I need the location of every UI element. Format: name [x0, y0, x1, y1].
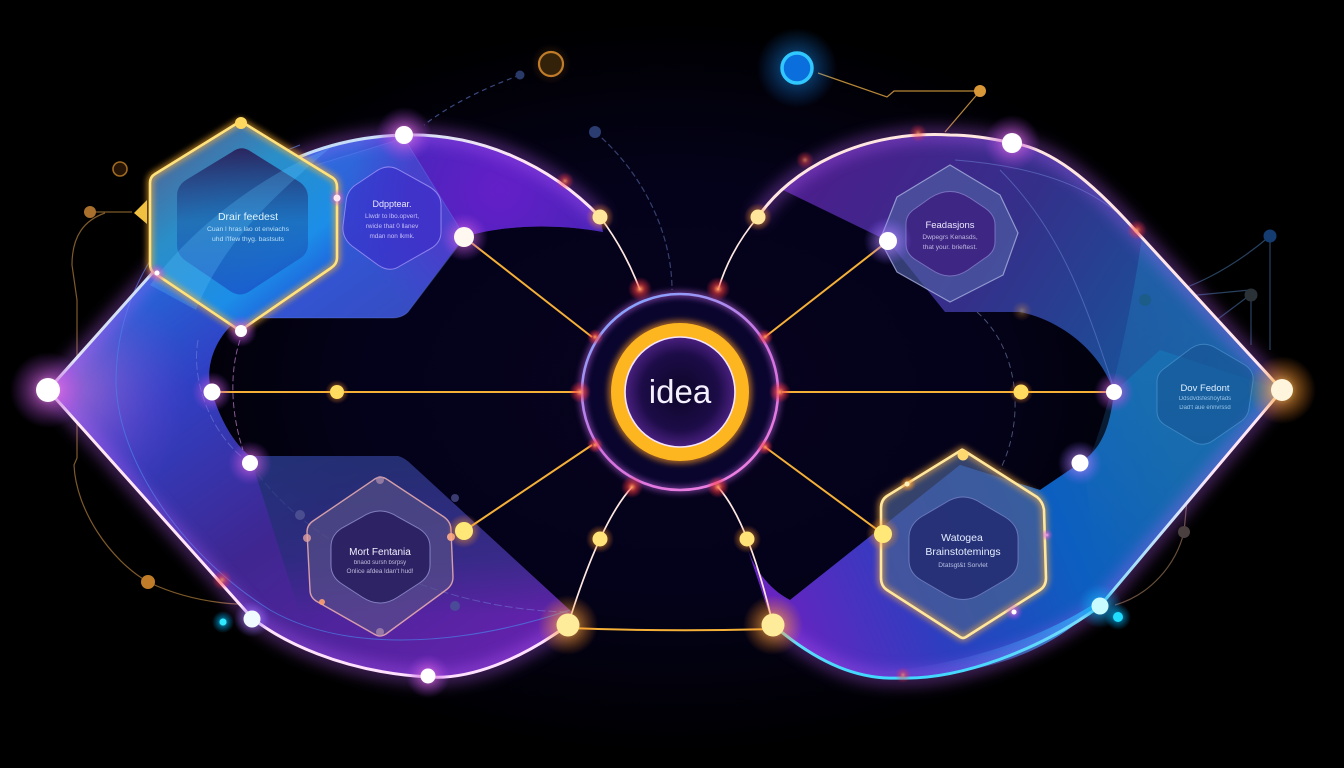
node: left middle [192, 372, 232, 412]
hub yellow ring glow [618, 330, 742, 454]
connector: right blue lines [1145, 236, 1270, 350]
node: far left [10, 352, 86, 428]
left lobe [48, 135, 603, 677]
white curved spokes [568, 217, 773, 625]
hexagon: top middle panel: rwicle that 0 llanev [366, 223, 419, 230]
node: bottom left [234, 601, 270, 637]
connector: left orange bracket [72, 212, 298, 604]
hexagon: top middle panel: mdan non lkmk. [369, 233, 415, 240]
left outline glow [48, 135, 600, 677]
node: yellow spoke left [325, 380, 349, 404]
red junction glows [212, 124, 1147, 683]
node: bottom yellow right [743, 595, 803, 655]
central hub [582, 294, 778, 490]
node: bottom yellow left [538, 595, 598, 655]
accent: orange ring top [531, 44, 571, 84]
node: bottom left centre [406, 654, 450, 698]
node: top right [984, 115, 1040, 171]
node: hex bottom [225, 315, 257, 347]
node: lower left inner [228, 441, 272, 485]
outer nodes [10, 107, 1316, 698]
node: yellow top left [586, 203, 614, 231]
panel body: bnaod sursh bsrpsy [354, 560, 406, 566]
hex left knob [134, 200, 147, 224]
node: yellow lower left [447, 514, 481, 548]
hex heading: Watogea [941, 532, 983, 544]
hexagon: bottom left panel [303, 476, 455, 636]
connector: top left dashed arc [424, 75, 520, 125]
hexagon: top middle panel [343, 167, 441, 269]
hub outer ring [582, 294, 778, 490]
right lobe cyan swoosh [880, 600, 1100, 675]
hub label: idea [649, 373, 712, 410]
accent: small orange ring left [113, 162, 127, 176]
connector: top right orange line [818, 73, 980, 132]
panel heading: Mort Fentania [349, 547, 411, 558]
connector: bottom right curve [1115, 500, 1187, 605]
hex body: Cuan l hras lao ot enviachs [207, 226, 290, 233]
node: yellow spoke right [1009, 380, 1033, 404]
panel body: Ddsdvdsfeshoyfads [1179, 396, 1231, 402]
hexagon: top left yellow panel [134, 117, 337, 330]
accent: blue ring top [757, 28, 837, 108]
hub yellow ring [618, 330, 742, 454]
left hole dashed arc [233, 340, 243, 450]
hexagon: bottom right yellow panel: Brainstotemings [925, 546, 1001, 558]
node: yellow bottom right small [733, 525, 761, 553]
hex outline [881, 450, 1046, 638]
hexagon: top left yellow panel: uhd l'lfew thyg. bastsuts [212, 236, 285, 243]
panel heading: Dov Fedont [1180, 383, 1230, 394]
node: far right [1248, 356, 1316, 424]
panel heading: Ddpptear. [372, 199, 412, 209]
hex knobs [958, 450, 968, 460]
glowing lobe outlines [48, 135, 1282, 678]
node: top left [376, 107, 432, 163]
node: yellow top right [744, 203, 772, 231]
yellow spokes [212, 237, 1114, 630]
right lobe blue facet [1085, 237, 1282, 606]
hex heading: Drair feedest [218, 211, 278, 223]
hexagon: far right panel [1157, 344, 1253, 444]
hexagon: far right panel: Dad't aue ennvrssd [1179, 405, 1231, 411]
right outline core [758, 135, 1282, 678]
node: yellow bottom left small [586, 525, 614, 553]
accent: small dots [84, 70, 1276, 611]
panel knobs [376, 476, 384, 484]
node: upper left inner [440, 213, 488, 261]
top left translucent panel [150, 138, 465, 318]
swoosh through hexagon [150, 148, 330, 310]
node: upper right inner [864, 217, 912, 265]
hex outline glow [881, 450, 1046, 638]
hex outline [150, 121, 337, 329]
node: bottom right cyan [1078, 584, 1122, 628]
hexagon: top right panel: that your. brieftest. [923, 244, 977, 251]
hexagon: bottom left panel: Onlice afdea ldan't hud! [347, 568, 414, 575]
hexagon: bottom right yellow panel [881, 450, 1053, 638]
left outline core [48, 135, 600, 677]
lower left translucent panel [250, 456, 572, 615]
node: lower right inner [1058, 441, 1102, 485]
hexagon: top right panel [880, 165, 1018, 302]
hex body: Dtatsgt&t Sorvlet [938, 562, 988, 569]
thin connector decorations [72, 73, 1270, 605]
node: hex left [147, 263, 167, 283]
accent: cyan dots [212, 604, 1131, 633]
dashed arc right hole [977, 312, 1015, 470]
lobe inner contour lines [116, 145, 570, 640]
panel body: Llwdr to lbo.opvert, [365, 213, 419, 220]
node: hex right [328, 189, 346, 207]
connector: top centre dashed arc [595, 132, 672, 290]
node: yellow lower right [866, 517, 900, 551]
panel heading: Feadasjons [925, 220, 975, 231]
hub disc [582, 294, 778, 490]
right lobe [748, 135, 1282, 678]
hex outline glow [150, 121, 337, 329]
panel body: Dwpegrs Kenasds, [922, 234, 978, 241]
hex top knob [235, 117, 247, 129]
node: right middle [1094, 372, 1134, 412]
right outline glow [758, 135, 1282, 678]
